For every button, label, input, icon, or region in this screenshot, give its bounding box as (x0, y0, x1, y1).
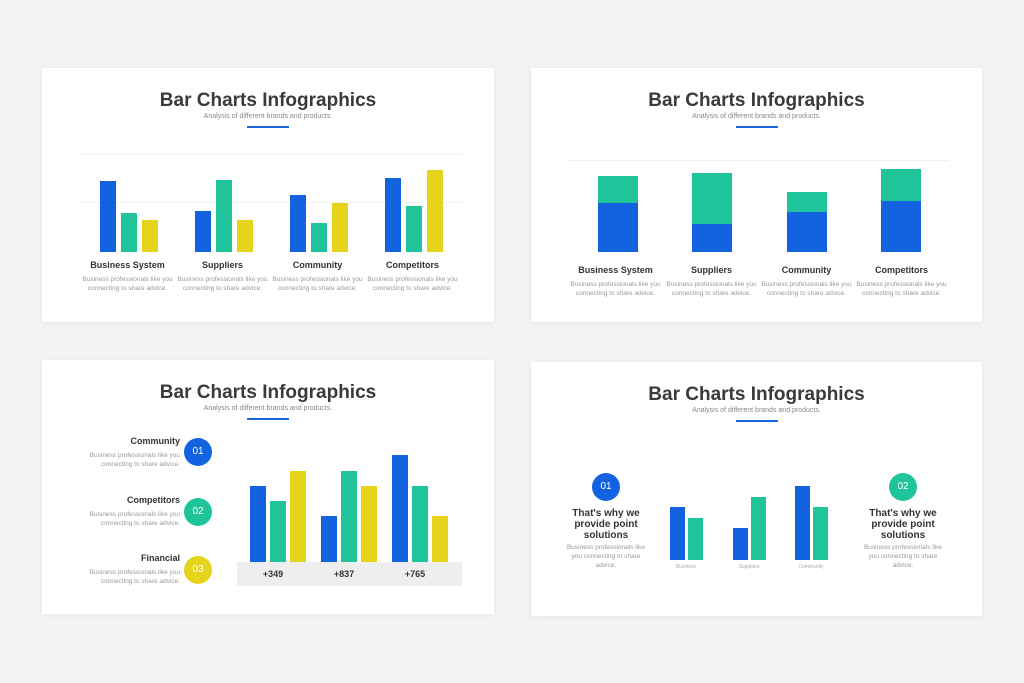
bar chart with totals (237, 455, 462, 586)
panel: top-left grouped bars: Business professionals like you connecting to share advice. (177, 276, 268, 292)
title: Bar Charts Infographics (160, 90, 376, 111)
callout 02: That's why we provide point solutions (869, 508, 937, 541)
callout 02: 02 (897, 481, 909, 492)
bar chart: Suppliers (739, 564, 759, 570)
subtitle: Analysis of different brands and products. (204, 405, 332, 412)
list item 01: Community (130, 436, 180, 446)
callout 01 (567, 473, 645, 569)
callout 01: Business professionals like you connecting to share advice. (567, 544, 645, 569)
panel: top-right stacked bars: Competitors (875, 265, 928, 275)
bar chart (670, 486, 828, 570)
panel: top-right stacked bars (531, 68, 982, 322)
callout 02: Business professionals like you connecting to share advice. (864, 544, 942, 569)
bar chart with totals: +765 (405, 569, 425, 579)
panel: top-right stacked bars: Community (782, 265, 831, 275)
list item 02: Competitors (127, 495, 180, 505)
list item 03: 03 (192, 564, 204, 575)
bar chart with totals: +837 (334, 569, 354, 579)
title: Bar Charts Infographics (160, 382, 376, 403)
list item 01 (90, 436, 212, 468)
panel: top-left grouped bars (42, 68, 494, 322)
bar chart: Business (676, 564, 696, 570)
list item 03: Financial (141, 553, 180, 563)
list item 02: Business professionals like you connecting to share advice. (90, 511, 180, 527)
labels: Business System (90, 260, 165, 270)
stacked bar chart (598, 169, 921, 252)
list item 03 (90, 553, 212, 585)
callout 01: That's why we provide point solutions (572, 508, 640, 541)
bar chart: Community (798, 564, 824, 570)
callout 02 (864, 473, 942, 569)
panel: top-left grouped bars: Suppliers (202, 260, 243, 270)
panel: top-right stacked bars: Suppliers (691, 265, 732, 275)
panel: top-right stacked bars: Business professionals like you connecting to share advice. (761, 281, 852, 297)
title: Bar Charts Infographics (648, 384, 865, 405)
panel: top-right stacked bars: Business professionals like you connecting to share advice. (570, 281, 661, 297)
title: Bar Charts Infographics (648, 90, 865, 111)
panel: top-right stacked bars: Business professionals like you connecting to share advice. (666, 281, 757, 297)
panel: bottom-left numbered list + bars (42, 360, 494, 614)
bar chart with totals: +349 (263, 569, 283, 579)
panel: top-left grouped bars: Business professionals like you connecting to share advice. (82, 276, 173, 292)
subtitle: Analysis of different brands and products. (204, 113, 332, 120)
callout 01: 01 (600, 481, 612, 492)
list item 02 (90, 495, 212, 527)
bar chart (100, 170, 443, 252)
panel: top-left grouped bars: Community (293, 260, 342, 270)
subtitle: Analysis of different brands and products. (692, 407, 821, 414)
list item 01: Business professionals like you connecting to share advice. (90, 452, 180, 468)
panel: top-right stacked bars: Business professionals like you connecting to share advice. (856, 281, 947, 297)
labels: Business System (578, 265, 653, 275)
panel: top-left grouped bars: Competitors (386, 260, 439, 270)
panel: top-left grouped bars: Business professionals like you connecting to share advice. (367, 276, 458, 292)
subtitle: Analysis of different brands and products. (692, 113, 821, 120)
list item 02: 02 (192, 506, 204, 517)
panel: top-left grouped bars: Business professionals like you connecting to share advice. (272, 276, 363, 292)
list item 03: Business professionals like you connecting to share advice. (90, 569, 180, 585)
panel: bottom-right two callouts + bars (531, 362, 982, 616)
list item 01: 01 (192, 446, 204, 457)
